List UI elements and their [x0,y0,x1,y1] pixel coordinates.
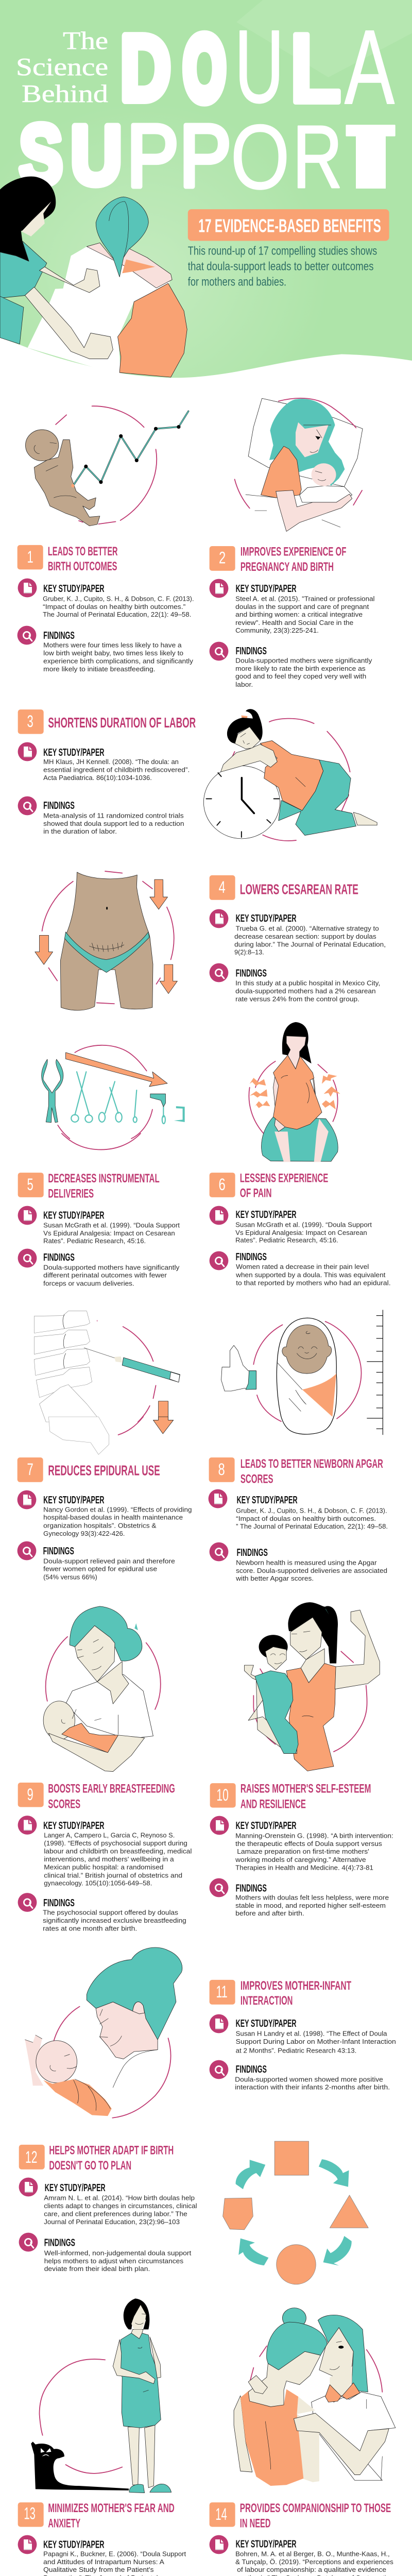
findings text: deviate from their ideal birth plan. [44,2266,150,2273]
key study text: KEY STUDY/PAPER [43,1820,105,1832]
findings text: Doula-supported mothers have significantly [43,1264,180,1272]
findings text [235,1883,389,1917]
key study text [235,2538,393,2576]
heading [240,1171,328,1200]
key study text: doulas in the support and care of pregnant [235,603,369,611]
icon: document [210,2014,228,2033]
badge: number 4 [210,875,235,900]
icon: document [18,1490,36,1509]
icon: magnifier [210,1878,228,1897]
heading: INTERACTION [241,1994,293,2008]
badge: number 13: 13 [24,2504,36,2523]
findings text: FINDINGS [43,1251,75,1263]
intro callout badge [188,209,389,241]
panel: benefit 11 [25,1947,396,2118]
badge: number 12 [19,2145,45,2170]
badge: number 11 [210,1980,235,2005]
key study text: Gruber, K. J., Cupito, S. H., & Dobson, C. F. (2013). [43,596,194,603]
illustration: cycle of shapes and arrows [223,2141,368,2284]
title: SUPPORT [19,106,396,208]
key study text: KEY STUDY/PAPER [236,1820,297,1832]
heading: DOESN'T GO TO PLAN [49,2159,131,2173]
findings text [43,1251,180,1287]
findings text: Meta-analysis of 11 randomized control trials [43,812,184,820]
key study text: review". Health and Social Care in the [235,619,353,626]
title: SUPPORT: U [71,109,122,202]
key study text [43,747,190,782]
findings text: rates at one month after birth. [43,1925,137,1933]
key study text: organization hospitals”. Obstetrics & [43,1522,157,1530]
findings text: FINDINGS [43,1897,75,1909]
findings text [43,800,184,835]
findings text: showed that doula support led to a reduction [43,820,184,827]
icon: document [18,2535,37,2554]
badge: number 13 [18,2502,44,2527]
badge: number 9: 9 [27,1786,33,1804]
panel: benefit 6 [210,1022,391,1287]
key study text [43,1494,192,1537]
icon: document [18,742,37,761]
key study text: Rates”. Pediatric Research, 45:16. [43,1238,146,1245]
heading: SCORES [48,1797,80,1811]
panel: benefit 1: BIRTH OUTCOMES [48,560,117,573]
icon: document [18,1816,37,1835]
key study text: Langer A, Campero L, Garcia C, Reynoso S. [44,1832,175,1839]
key study text: essential ingredient of childbirth rediscovered”. [43,767,190,774]
findings text: before and after birth. [235,1910,304,1917]
key study text: KEY STUDY/PAPER [236,2538,297,2550]
key study text: Gynecology 93(3):422-426. [43,1531,125,1537]
illustration: delivery instruments and down arrow [42,1045,185,1149]
heading [241,1782,371,1811]
key study text: “Impact of doulas on healthy birth outcomes.” [43,603,185,611]
findings text: FINDINGS [236,968,267,979]
heading: SCORES [241,1472,273,1486]
badge: number 3 [18,709,44,734]
heading: IN NEED [240,2517,271,2530]
findings text [43,1545,175,1581]
findings text [44,2236,192,2273]
badge: number 9 [18,1783,44,1807]
findings text: Doula-supported mothers were significantly [235,657,372,665]
panel: benefit 5: DECREASES INSTRUMENTAL [48,1172,160,1185]
findings text [235,968,380,1003]
badge: number 3: 3 [27,713,33,731]
heading: ANXIETY [48,2517,80,2530]
findings text [235,1547,387,1582]
findings text: FINDINGS [44,2236,75,2248]
icon: magnifier [18,1541,36,1560]
icon: document [19,2178,38,2196]
findings text: FINDINGS [43,1545,74,1557]
illustration: torso with cesarean scar and down arrows [35,871,177,1010]
heading [48,1782,175,1811]
key study text: Journal of Perinatal Education, 23(2):96–103 [44,2219,180,2226]
key study text: (1998). “Effects of psychosocial support during [44,1840,187,1847]
title: SUPPORT: P [127,106,179,206]
badge: number 7 [18,1458,43,1482]
key study text: working models of caregiving.” Alternative [235,1856,366,1863]
key study text [43,583,194,618]
findings text: (54% versus 66%) [43,1574,97,1581]
key study text: Community, 23(3):225-241. [235,628,319,634]
key study text: KEY STUDY/PAPER [43,747,105,758]
findings text: FINDINGS [236,2063,267,2075]
panel: benefit 12: HELPS MOTHER ADAPT IF BIRTH [49,2143,174,2157]
key study text: Susan McGrath et al. (1999). “Doula Support [43,1222,180,1229]
illustration: spine and epidural syringe with down arrow [34,1311,180,1454]
icon: magnifier [18,626,36,645]
key study text: Papagni K., Buckner, E. (2006). “Doula Support [43,2551,186,2558]
findings text: Women rated a decrease in their pain level [236,1264,369,1270]
key study text: clinical trial.” British journal of obstetrics and [44,1872,182,1879]
panel: benefit 7: REDUCES EPIDURAL USE [48,1463,160,1479]
findings text [43,1897,186,1933]
icon: document [210,1206,228,1225]
icon: magnifier [18,1249,37,1267]
findings text: FINDINGS [237,1547,268,1558]
key study text: gynaecology. 105(10):1056-649–58. [44,1880,152,1887]
title: The Science Behind: The [63,26,108,55]
findings text: FINDINGS [43,800,75,811]
key study text: MH Klaus, JH Kennell. (2008). “The doula: an [43,759,179,766]
panel: benefit 3 [18,709,377,841]
key study text: Vs Epidural Analgesia: Impact on Cesarean [43,1230,175,1237]
findings text: helps mothers to adjust when circumstances [44,2258,183,2265]
panel: benefit 5 [18,1045,185,1287]
badge: number 10 [210,1783,236,1808]
panel: benefit 1 [18,406,194,673]
key study text: at 2 Months”. Pediatric Research 43:13. [236,2047,356,2055]
key study text: “Impact of doulas on healthy birth outcomes. [236,1515,376,1522]
key study text [236,2018,396,2055]
heading: DELIVERIES [48,1187,94,1200]
title: SUPPORT: T [346,107,396,207]
icon: magnifier [210,642,228,660]
illustration: doula supporting pregnant mother [0,177,187,377]
key study text [235,1820,393,1872]
icon: document [18,1206,37,1225]
key study text: interventions, and mothers' wellbeing in a [44,1856,174,1863]
key study text: KEY STUDY/PAPER [236,912,297,924]
key study text: Acta Paediatrica. 86(10):1034-1036. [43,774,152,782]
findings text: Well-informed, non-judgemental doula support [44,2250,192,2257]
findings text: good and to feel they coped very well with [235,673,366,680]
illustration: swaddled smiling newborn, thumbs up and scale [221,1310,383,1435]
key study text: and birthing women: a critical integrative [235,612,363,618]
key study text: and Attitudes of Intrapartum Nurses: A [43,2558,165,2566]
icon: document [210,1816,229,1835]
panel: benefit 8 [209,1310,388,1582]
badge: number 8 [209,1458,235,1482]
title: The Science Behind: Behind [22,79,108,108]
badge: number 7: 7 [27,1460,33,1479]
title: SUPPORT: P [179,106,231,206]
findings text: FINDINGS [236,1883,267,1894]
key study text: care, and client preferences during labor.” The [44,2211,187,2218]
heading [241,1457,383,1486]
key study text [236,1494,388,1530]
title: SUPPORT: S [19,107,63,202]
badge: number 4: 4 [218,878,226,896]
findings text: rate versus 24% from the control group. [235,996,359,1003]
findings text: experience birth complications, and significantly [43,658,193,665]
hero background [0,0,412,378]
findings text: The psychosocial support offered by doulas [43,1909,178,1917]
key study text: Lamaze preparation on first-time mothers' [237,1849,369,1855]
key study text: The Journal of Perinatal Education, 22(1): 49–58. [43,611,191,618]
findings text [235,2063,390,2091]
icon: magnifier [18,1893,37,1912]
title: DOULA: L [289,14,341,123]
findings text: low birth weight baby, two times less likely to [43,650,183,657]
text: MINIMIZES MOTHER'S FEAR AND [48,2501,175,2515]
key study text: KEY STUDY/PAPER [236,583,297,595]
heading [241,545,346,574]
panel: benefit 2 [210,398,375,688]
badge: number 14: 14 [215,2505,227,2523]
illustration: pregnant woman with fearful shadow [31,2298,171,2493]
key study text: 9(2):8–13. [234,949,264,956]
icon: magnifier [19,2233,38,2251]
title: DOULA: D [121,16,171,120]
key study text: Mexican public hospital: a randomised [44,1864,163,1871]
findings text: different perinatal outcomes with fewer [43,1272,167,1279]
key study text: Vs Epidural Analgesia: Impact on Cesarean [235,1229,367,1236]
panel: benefit 13 [18,2298,186,2576]
icon: magnifier [210,1543,228,1561]
intro text: for mothers and babies. [188,275,286,288]
icon: document [210,909,228,928]
heading [48,2501,175,2530]
badge: number 8: 8 [218,1460,225,1479]
key study text [235,1209,372,1244]
illustration: mother breastfeeding baby [43,1606,161,1772]
findings text: FINDINGS [43,630,75,641]
findings text: Mothers were four times less likely to have a [43,642,182,649]
findings text: forceps or vacuum deliveries. [43,1280,134,1287]
icon: magnifier [210,1251,228,1270]
title: DOULA: U [235,9,284,124]
illustration: woman leaning on clock [203,709,377,841]
findings text [43,630,193,673]
key study text: labour and childbirth on breastfeeding, medical [44,1848,192,1855]
findings text: more likely to initiate breastfeeding. [43,666,156,673]
title: DOULA: O [183,17,226,120]
key study text: Qualitative Study from the Patient's [43,2567,154,2573]
icon: document [210,2535,228,2554]
illustration: mother and baby sleeping [235,398,363,531]
key study text [235,583,375,634]
title: The Science Behind [16,26,108,108]
key study text: hospital-based doulas in health maintenance [43,1514,183,1521]
illustration: mother gazing at baby [25,1947,182,2118]
findings text: in the duration of labor. [43,828,117,835]
findings text: fewer women opted for epidural use [43,1566,157,1573]
heading [48,545,118,573]
key study text [43,2539,186,2576]
badge: number 2 [210,546,235,571]
illustration: two women in companionship [234,2308,396,2486]
title: DOULA [121,8,394,126]
icon: magnifier [18,796,37,815]
icon: magnifier [210,963,228,982]
key study text: Amram N. L. et al. (2014). “How birth doulas help [44,2195,195,2202]
key study text: KEY STUDY/PAPER [236,2018,297,2029]
badge: number 14 [210,2502,235,2527]
panel: benefit 10 [210,1602,393,1917]
title: The Science Behind: Science [16,53,108,81]
key study text: clients adapt to changes in circumstances, clinical [44,2203,197,2210]
title: SUPPORT: R [293,107,342,207]
key study text: KEY STUDY/PAPER [43,1210,105,1221]
key study text: KEY STUDY/PAPER [45,2182,106,2194]
panel: benefit 9 [18,1606,192,1933]
key study text: KEY STUDY/PAPER [43,583,105,595]
findings text: Doula-support relieved pain and therefore [43,1558,175,1565]
illustration: fetus and rising chart [25,406,188,526]
findings text: more likely to rate the birth experience as [235,665,366,672]
key study text [234,912,386,956]
key study text [43,1210,180,1245]
heading: OF PAIN [240,1186,272,1200]
findings text [235,645,372,688]
panel: benefit 4 [35,871,386,1010]
panel: benefit 1: LEADS TO BETTER [48,545,118,558]
badge: number 12: 12 [25,2148,37,2167]
icon: magnifier [210,2060,228,2079]
intro text [188,244,377,288]
heading: AND RESILIENCE [241,1798,306,1811]
panel: benefit 3: SHORTENS DURATION OF LABOR [48,715,196,731]
key study text [44,2182,197,2226]
illustration: woman in pain on birthing ball [249,1022,340,1162]
heading [48,1172,160,1200]
badge: number 5: 5 [27,1176,33,1194]
key study text: KEY STUDY/PAPER [237,1494,298,1506]
key study text: Rates”. Pediatric Research, 45:16. [235,1237,338,1244]
key study text: Nancy Gordon et al. (1999). “Effects of providing [43,1506,192,1514]
findings text [235,1251,391,1287]
title: SUPPORT: O [231,106,290,208]
findings text: significantly increased exclusive breastfeeding [43,1917,186,1924]
key study text: KEY STUDY/PAPER [43,1494,105,1506]
findings text: FINDINGS [236,1251,267,1263]
heading [49,2143,174,2173]
findings text: FINDINGS [236,645,267,657]
key study text: KEY STUDY/PAPER [43,2539,105,2551]
illustration: mother and child flexing [244,1602,380,1771]
panel: benefit 12 [19,2141,368,2284]
heading [241,1979,351,2008]
text: BOOSTS EARLY BREASTFEEDING [48,1782,175,1795]
icon: document [209,1489,227,1508]
badge: number 1: 1 [27,548,33,566]
panel: benefit 14 [209,2308,396,2576]
badge: number 6 [210,1173,235,1197]
key study text: KEY STUDY/PAPER [236,1209,297,1221]
icon: document [210,579,228,598]
badge: number 10: 10 [216,1786,229,1804]
panel: benefit 7 [18,1311,192,1581]
key study text [43,1820,192,1887]
badge: number 11: 11 [216,1982,228,2001]
badge: number 2: 2 [219,549,226,567]
badge: number 1 [18,545,43,569]
findings text: labor. [235,681,253,688]
heading [240,2501,391,2530]
badge: number 6: 6 [218,1176,226,1194]
icon: document [18,579,37,597]
badge: number 5 [18,1173,44,1197]
findings text: with better Apgar scores. [235,1575,314,1582]
